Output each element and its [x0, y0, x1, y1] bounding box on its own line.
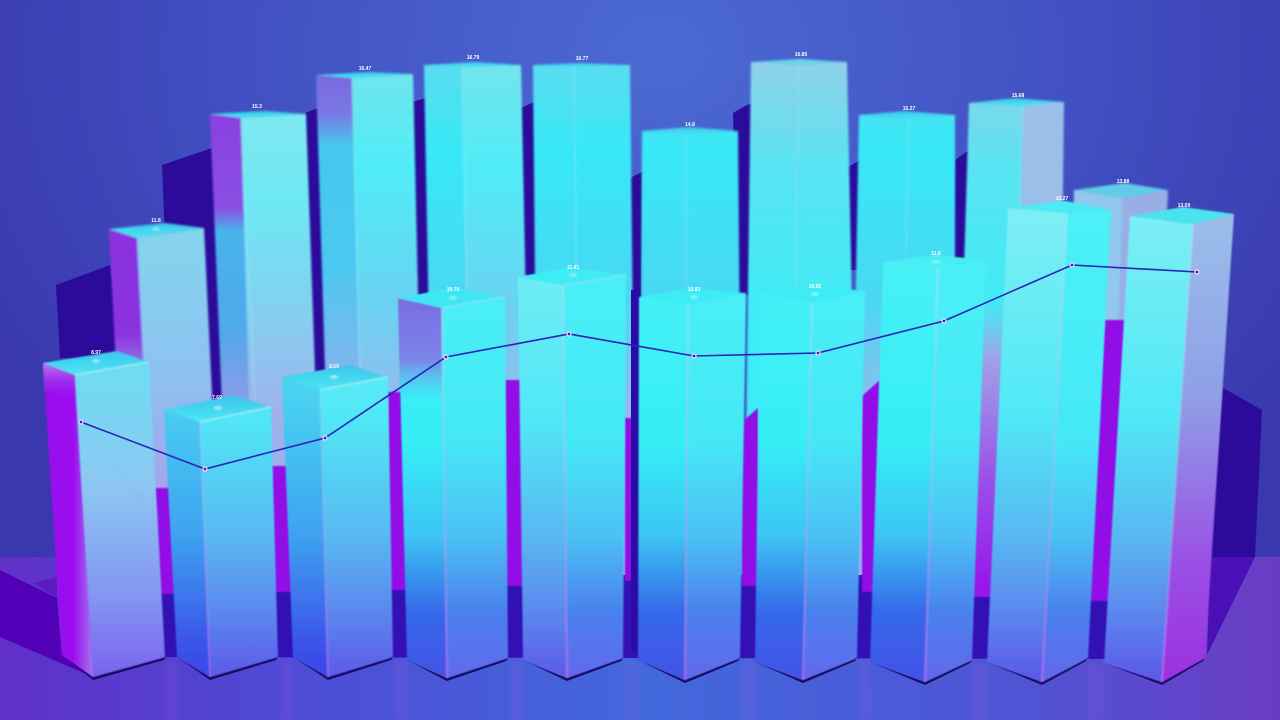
front bar 3: 8.59 [282, 364, 393, 680]
back row value labels: 16.85 [795, 52, 807, 58]
data point markers [79, 263, 1199, 471]
front bar 10: 13.09 [1104, 203, 1234, 685]
back bar 9: 15.68 [954, 98, 1064, 600]
back row value labels: 16.47 [359, 66, 371, 72]
back row value labels: 15.27 [903, 106, 915, 112]
back bar 8: 15.27 [850, 111, 955, 600]
wall shadow of the back row [56, 98, 1262, 557]
front row bars [43, 196, 1234, 685]
back bar 5: 16.77 [533, 63, 636, 600]
dark vertical gap beside bar 6 [631, 290, 640, 652]
front bar 2: 7.69 [164, 395, 278, 680]
front bar 2: 7.69: 7.69 [212, 395, 222, 401]
front bar 5: 11.41: 11.41 [567, 265, 579, 271]
back row value labels: 11.8 [151, 218, 161, 224]
front bar 9: 13.27 [987, 196, 1111, 685]
back row value labels: 15.68 [1012, 93, 1024, 99]
front bar 9: 13.27: 13.27 [1056, 196, 1068, 202]
front bar 7: 10.91: 10.91 [809, 284, 821, 290]
back bar 1: 11.8 [109, 223, 222, 600]
back row value labels: 16.79 [467, 55, 479, 61]
back bar 2: 15.3 [210, 111, 323, 600]
back row value labels: 13.88 [1117, 179, 1129, 185]
back wall [0, 0, 1280, 558]
back row value labels: 14.8 [685, 122, 695, 128]
front bar 6: 10.83 [638, 287, 746, 683]
magenta shadow bands between front bars [155, 300, 1130, 601]
back row value labels: 16.77 [576, 56, 588, 62]
back bar 4: 16.79 [424, 62, 532, 600]
dark floor shadow band behind front bars [155, 575, 1125, 659]
line chart overlay [79, 263, 1199, 471]
back bar 10: 13.88 [1065, 183, 1168, 600]
back row bars [109, 59, 1168, 600]
front bar 6: 10.83: 10.83 [688, 287, 700, 293]
back bar 6: 14.8 [640, 127, 742, 600]
front bar 1: 8.97 [43, 350, 166, 680]
back bar 3: 16.47 [316, 72, 425, 600]
floor [0, 557, 1280, 720]
edge highlights of the back row [241, 65, 1023, 400]
back row value labels: 15.3 [252, 104, 262, 110]
front bar 8: 11.8: 11.8 [931, 251, 941, 257]
front bar 4: 10.79: 10.79 [447, 287, 459, 293]
front bar 8: 11.8 [870, 251, 986, 685]
floor reflections [166, 660, 1104, 720]
front bar 7: 10.91 [755, 284, 865, 683]
back row value labels [151, 52, 1129, 224]
front bar 10: 13.09: 13.09 [1178, 203, 1190, 209]
front bar 3: 8.59: 8.59 [329, 364, 339, 370]
front bar 4: 10.79 [398, 287, 508, 681]
back bar 7: 16.85 [744, 59, 858, 600]
front bar 1: 8.97: 8.97 [91, 350, 101, 356]
front bar 5: 11.41 [518, 265, 626, 681]
